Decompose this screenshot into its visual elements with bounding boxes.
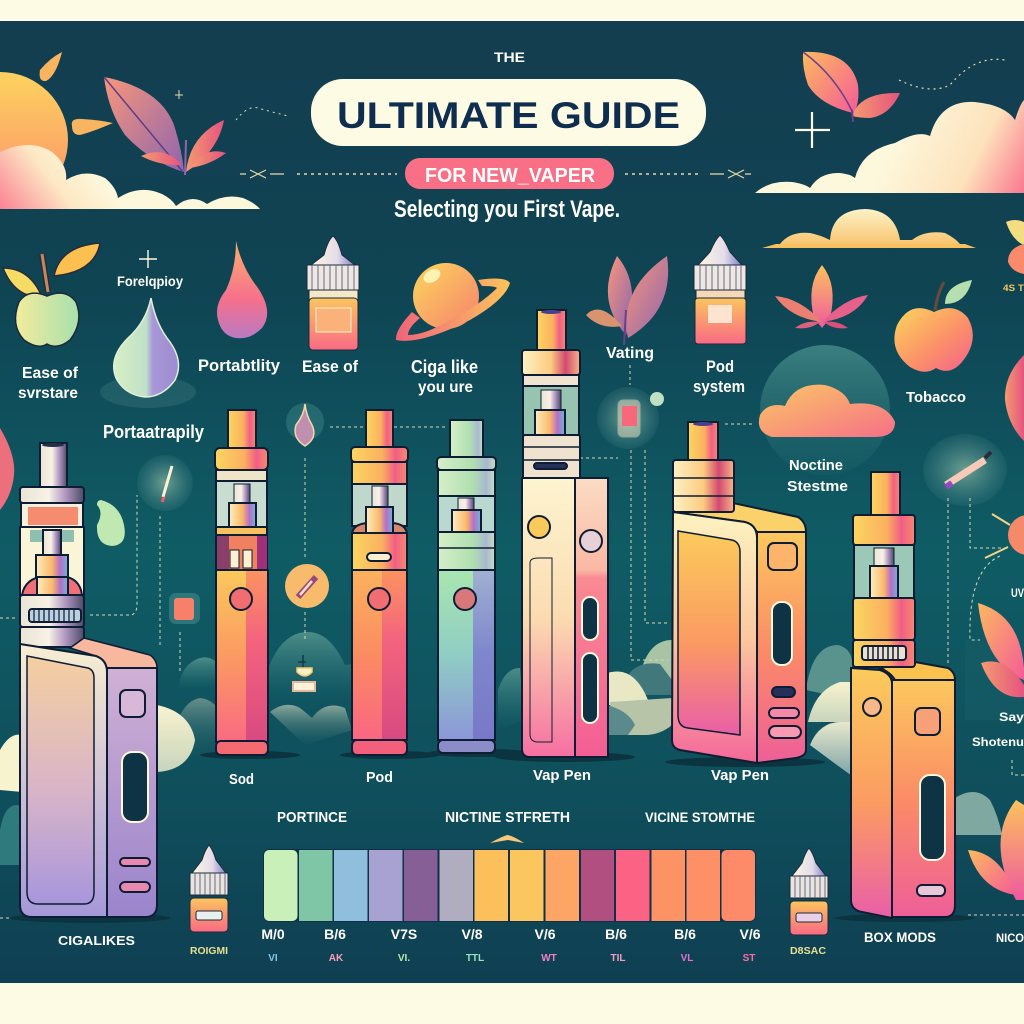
icon: orange sun with rays, right	[985, 514, 1024, 558]
icon: small pot	[293, 655, 315, 691]
chart value labels	[261, 926, 761, 942]
device: wide Vap Pen box	[665, 422, 825, 767]
icon: coral square	[169, 593, 200, 624]
chart value labels: B/6	[324, 926, 346, 942]
background clouds behind the devices	[0, 632, 1024, 865]
icon: green liquid drop	[97, 500, 125, 546]
label: Say Shotenu: Shotenu	[972, 735, 1024, 749]
label: Noctine Stestme: Noctine	[789, 457, 843, 474]
chart value labels: B/6	[674, 926, 696, 942]
icon: cannabis leaf	[775, 265, 868, 328]
leaves: right bottom	[968, 800, 1024, 900]
title pill: ULTIMATE GUIDE	[337, 95, 680, 136]
dashed connector lines	[0, 365, 1024, 918]
chart headings: VICINE STOMTHE	[645, 809, 755, 825]
chart small labels	[268, 953, 755, 964]
icon: orange circle with pen	[285, 564, 329, 608]
chart small labels: AK	[329, 953, 344, 964]
label: Sod: Sod	[229, 771, 254, 788]
label: Ciga like you ure	[411, 357, 478, 396]
label: Portaatrapily: Portaatrapily	[103, 422, 204, 442]
partial pink leaf: right edge	[1005, 355, 1024, 441]
chart headings	[277, 809, 755, 826]
leaf pair: top right	[803, 52, 900, 122]
icon: green lilac drop	[100, 298, 196, 408]
chart small labels: VL	[681, 953, 693, 964]
icon: leaf sprig, Vating	[586, 256, 668, 345]
icon: small bottle, left of chart	[190, 845, 228, 932]
chart value labels: B/6	[605, 926, 627, 942]
label: Noctine Stestme	[787, 457, 848, 495]
chart headings: PORTINCE	[277, 809, 347, 826]
label: Vating: Vating	[606, 345, 654, 362]
label: Noctine Stestme: Stestme	[787, 478, 848, 495]
label: Pod: Pod	[366, 769, 393, 786]
label: Ciga like you ure: Ciga like	[411, 357, 478, 377]
chart headings: NICTINE STFRETH	[445, 809, 570, 826]
icon: ringed planet	[396, 263, 510, 341]
dashes and sprig: top right	[625, 59, 1005, 178]
icon: small pointer above the chart	[490, 835, 524, 843]
icon: bottle, pod system	[694, 235, 746, 344]
label: Pod system: Pod	[706, 357, 734, 376]
label: Ease of svrstare	[18, 365, 79, 402]
device: Pod pen	[340, 410, 440, 759]
leaves: right middle	[978, 603, 1024, 697]
leaf sprig: top left	[104, 77, 226, 175]
chart value labels: M/0	[261, 926, 285, 942]
label: Vap Pen, left: Vap Pen	[533, 767, 591, 784]
title pill	[311, 79, 706, 146]
chart value labels: V7S	[391, 926, 417, 942]
cloud: small golden bar	[762, 209, 976, 248]
chart small labels: VI.	[398, 953, 410, 964]
cloud: top left	[0, 145, 260, 209]
icon: e-liquid bottle	[307, 236, 359, 350]
icon: pod in halo	[597, 387, 664, 449]
label: Say Shotenu	[972, 710, 1024, 749]
label: Pod system: system	[693, 377, 745, 396]
label: 4S T: 4S T	[1003, 283, 1024, 293]
sun with flying leaves	[0, 52, 113, 208]
sparkle and dashes: top left	[175, 90, 397, 178]
label: BOX MODS: BOX MODS	[864, 929, 936, 945]
chart value labels: V/8	[461, 926, 483, 942]
icon: cloud in halo	[759, 345, 895, 475]
chart small labels: TIL	[610, 953, 626, 964]
device: Sod pen	[200, 410, 300, 759]
chart small labels: VI	[268, 953, 278, 964]
icon: drop in halo	[286, 403, 324, 446]
label: Forelqpioy	[117, 250, 183, 289]
device: green pen	[428, 420, 532, 757]
label: Say Shotenu: Say	[999, 710, 1024, 724]
chart small labels: WT	[541, 953, 557, 964]
label: ROIGMI: ROIGMI	[190, 946, 228, 957]
label: Forelqpioy: Forelqpioy	[117, 273, 183, 289]
icon: pink drop	[217, 241, 267, 338]
device: cigalike box mod, left	[10, 443, 170, 923]
subtitle pill	[405, 158, 614, 189]
chart small labels: ST	[743, 953, 755, 964]
nicotine strength colour bar	[263, 849, 756, 922]
label: Tobacco: Tobacco	[906, 389, 966, 406]
cloud: top right	[755, 100, 1024, 193]
label: Pod system	[693, 357, 745, 396]
label: Ease of: Ease of	[302, 357, 358, 376]
icon: partial apple, right edge	[1006, 220, 1024, 274]
icon: vape in halo, right	[923, 434, 1007, 506]
label: Ease of svrstare: svrstare	[18, 385, 78, 402]
chart value labels: V/6	[534, 926, 556, 942]
subtitle text: Selecting you First Vape.	[394, 196, 620, 223]
partial pink leaf: left edge	[0, 428, 14, 510]
label: Ciga like you ure: you ure	[418, 379, 473, 396]
heading: THE: THE	[494, 49, 525, 65]
label: CIGALIKES: CIGALIKES	[58, 933, 135, 948]
icon: small bottle, right of chart	[790, 848, 828, 935]
device: box mod, right	[835, 472, 975, 922]
icon: green apple with leaves	[3, 243, 100, 346]
chart small labels: TTL	[466, 953, 484, 964]
label: Portabtlity: Portabtlity	[198, 356, 281, 375]
icon: peach apple, tobacco	[894, 280, 973, 372]
subtitle pill: FOR NEW_VAPER	[425, 165, 596, 187]
device: tall Vap Pen	[495, 310, 635, 762]
sparkle: top right	[795, 112, 830, 148]
chart value labels: V/6	[739, 926, 761, 942]
label: D8SAC: D8SAC	[790, 946, 826, 957]
label: Ease of svrstare: Ease of	[22, 365, 79, 382]
icon: halo with pen, left	[137, 455, 193, 511]
label: Vap Pen, right: Vap Pen	[711, 767, 769, 784]
